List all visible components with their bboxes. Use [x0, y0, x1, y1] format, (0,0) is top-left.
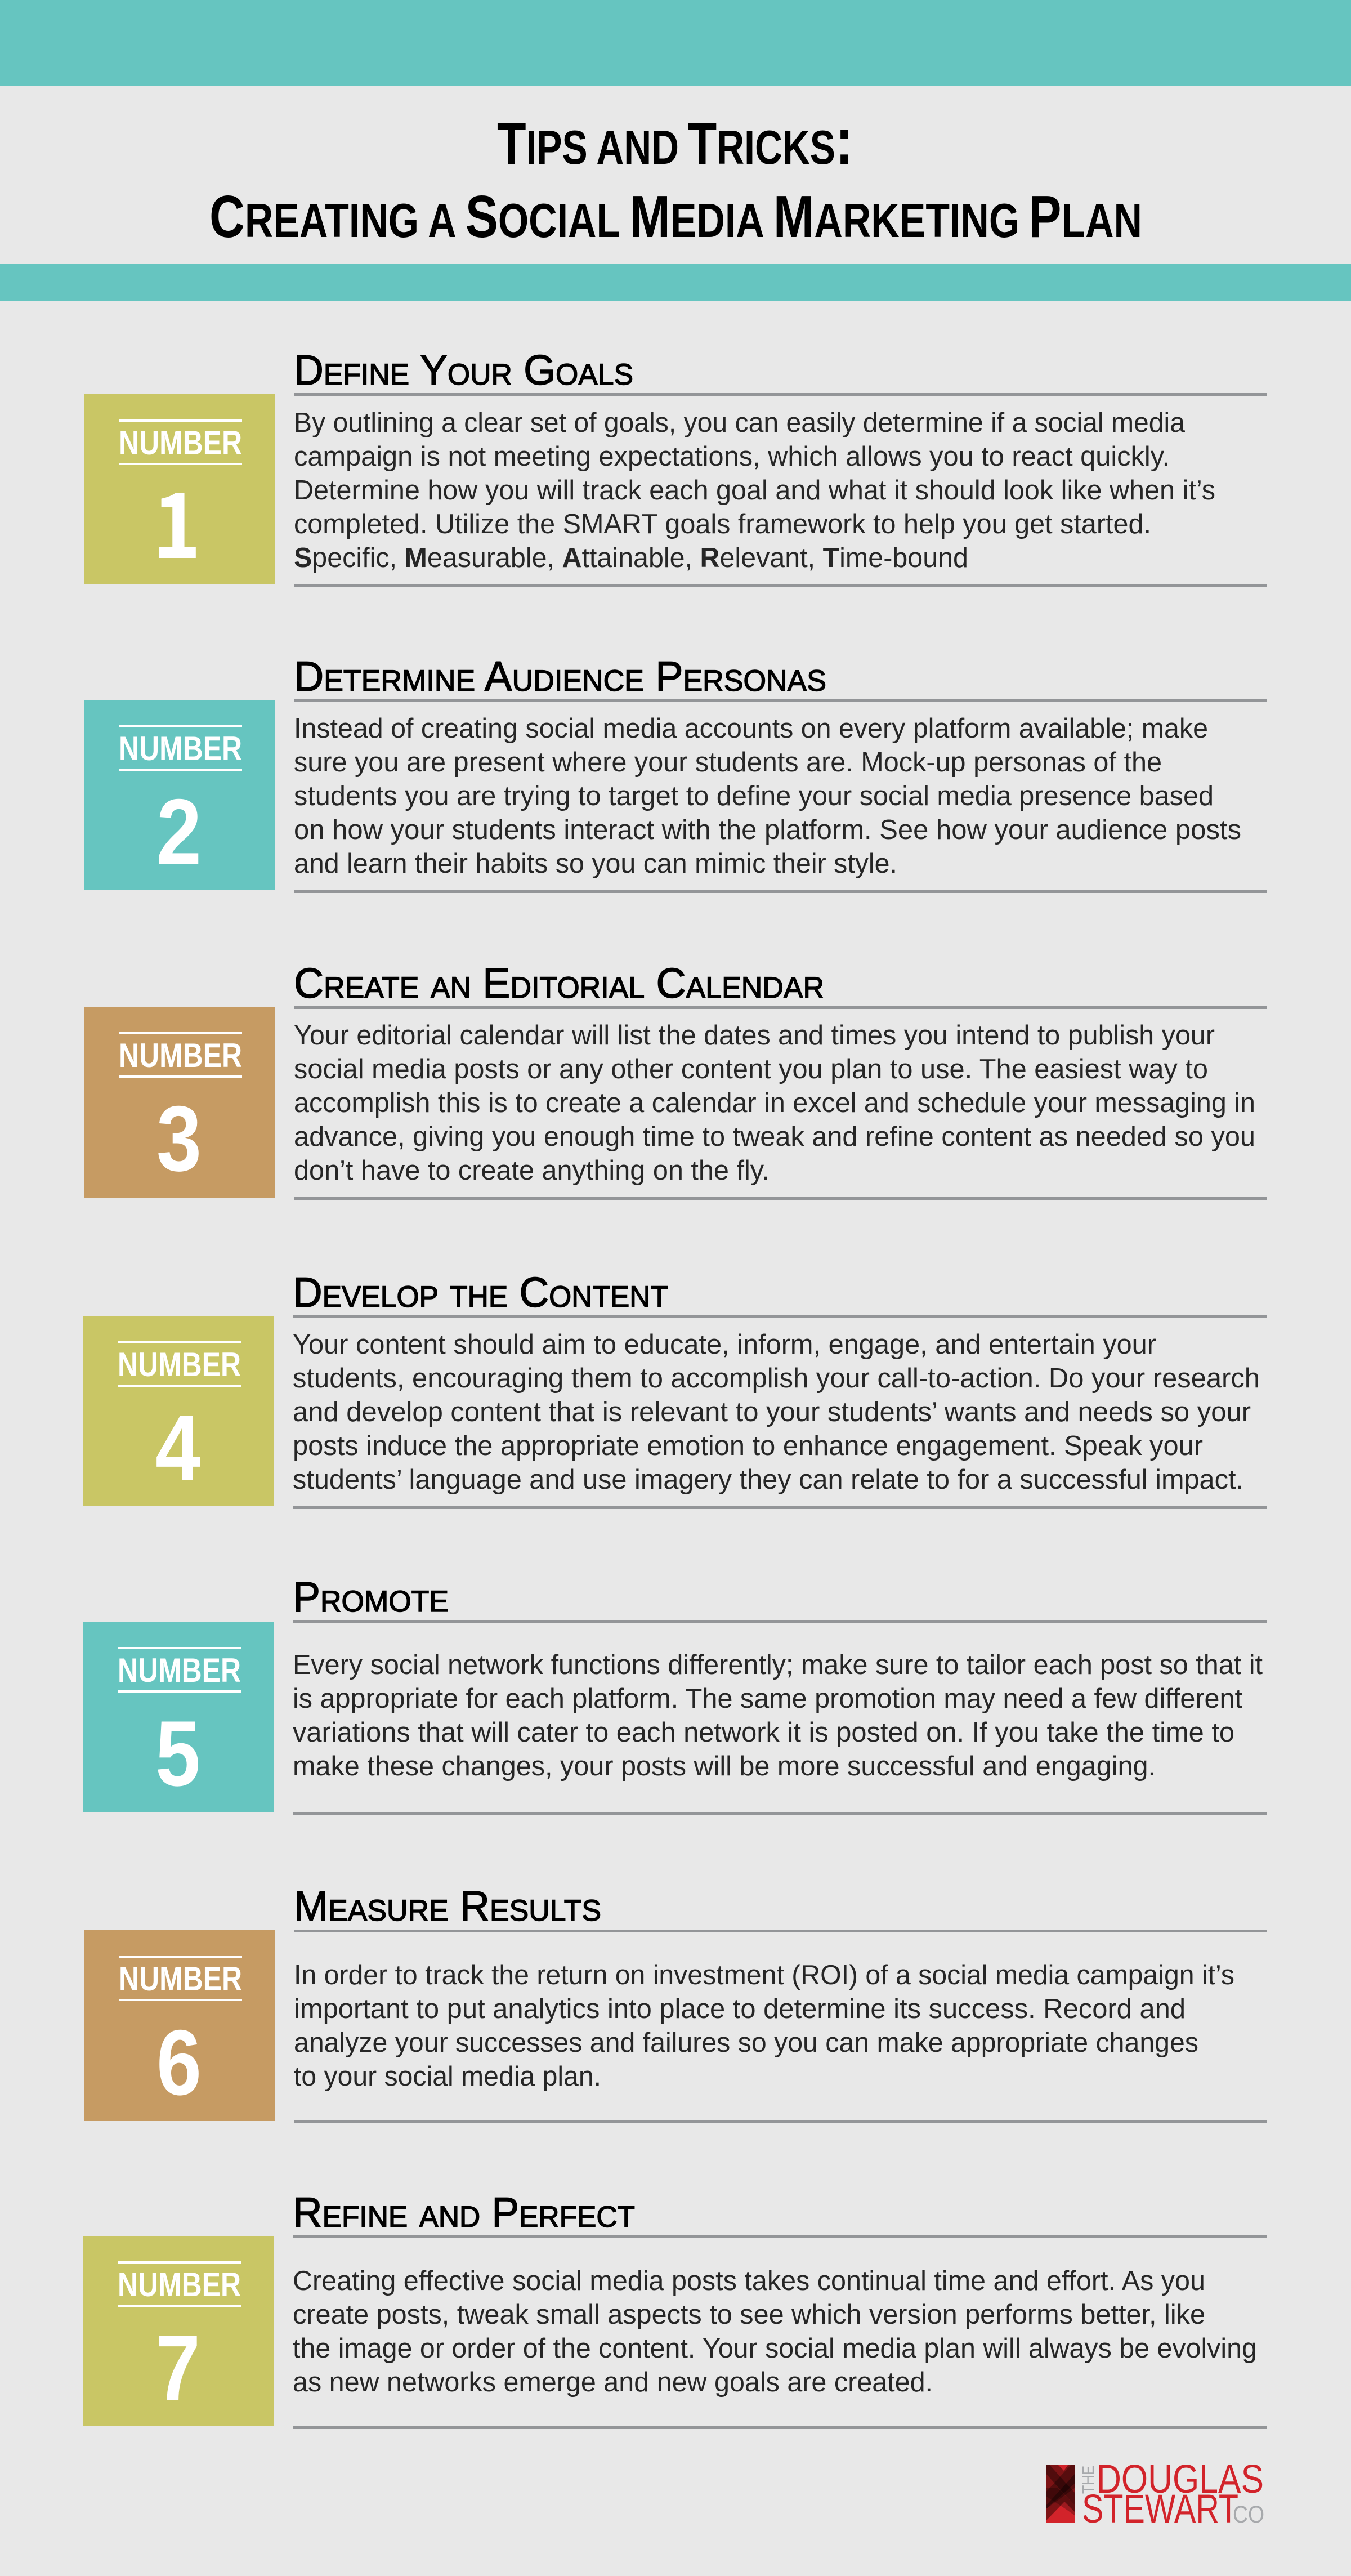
number badge 6: 6: [156, 2011, 202, 2114]
logo word THE: THE: [1080, 2466, 1098, 2494]
lower teal band: [0, 264, 1351, 301]
body text 7: the image or order of the content. Your social media plan will always be evolving: [293, 2333, 1257, 2364]
body text 2: [294, 713, 1241, 879]
body text 3: [294, 1020, 1255, 1186]
panel: tip 2 determine audience personas: [84, 653, 1267, 893]
number badge 7: NUMBER: [118, 2266, 241, 2303]
body text 7: [293, 2266, 1257, 2398]
heading 2: Determine Audience Personas: [294, 653, 826, 700]
title: [209, 102, 1142, 252]
title: Tips and Tricks:: [497, 102, 853, 178]
number badge 7: 7: [155, 2316, 200, 2419]
number badge 2: NUMBER: [119, 730, 242, 767]
heading 6: Measure Results: [294, 1882, 601, 1930]
panel: tip 6 measure results: [84, 1882, 1267, 2123]
body text 7: Creating effective social media posts takes continual time and effort. As you: [293, 2266, 1205, 2296]
number badge 4: 4: [155, 1396, 200, 1499]
body text 4: students, encouraging them to accomplish your call-to-action. Do your research: [293, 1363, 1260, 1394]
top teal band: [0, 0, 1351, 86]
panel: tip 3 create an editorial calendar: [84, 959, 1267, 1200]
number badge 1: 1: [153, 454, 201, 584]
body text 6: important to put analytics into place to determine its success. Record and: [294, 1994, 1186, 2024]
number badge 6: [84, 1930, 275, 2121]
body text 3: accomplish this is to create a calendar in excel and schedule your messaging in: [294, 1088, 1255, 1118]
logo: The Douglas Stewart Co: [1046, 2457, 1264, 2532]
number badge 3: NUMBER: [119, 1037, 242, 1074]
body text 2: students you are trying to target to define your social media presence based: [294, 781, 1214, 811]
panel: tip 1 define your goals: [84, 346, 1267, 587]
number badge 6: NUMBER: [119, 1960, 242, 1998]
panel: tip 5 promote: [83, 1573, 1267, 1815]
number badge 4: [83, 1316, 274, 1506]
body text 6: to your social media plan.: [294, 2061, 601, 2092]
number badge 1: NUMBER: [119, 424, 242, 462]
number badge 4: NUMBER: [118, 1346, 241, 1383]
body text 4: [293, 1329, 1260, 1495]
body text 7: create posts, tweak small aspects to see which version performs better, like: [293, 2300, 1205, 2330]
body text 4: Your content should aim to educate, inform, engage, and entertain your: [293, 1329, 1156, 1360]
body text 1: completed. Utilize the SMART goals framework to help you get started.: [294, 509, 1151, 539]
panel: tip 7 refine and perfect: [83, 2189, 1267, 2429]
body text 3: advance, giving you enough time to tweak and refine content as needed so you: [294, 1122, 1255, 1152]
body text 2: Instead of creating social media accounts on every platform available; make: [294, 713, 1208, 744]
icon: plaid square: [1046, 2465, 1075, 2523]
body text 5: variations that will cater to each network it is posted on. If you take the time to: [293, 1717, 1234, 1748]
body text 5: [293, 1650, 1263, 1782]
body text 2: sure you are present where your students are. Mock-up personas of the: [294, 747, 1162, 778]
heading 7: Refine and Perfect: [293, 2189, 635, 2236]
heading 1: Define Your Goals: [294, 346, 633, 394]
number badge 3: 3: [156, 1087, 202, 1190]
body text 5: Every social network functions differently; make sure to tailor each post so that it: [293, 1650, 1263, 1680]
body text 4: posts induce the appropriate emotion to enhance engagement. Speak your: [293, 1431, 1203, 1461]
number badge 5: 5: [155, 1702, 200, 1805]
body text 6: analyze your successes and failures so you can make appropriate changes: [294, 2028, 1198, 2058]
body text 2: and learn their habits so you can mimic their style.: [294, 849, 897, 879]
number badge 7: [83, 2236, 274, 2426]
body text 1: Determine how you will track each goal and what it should look like when it’s: [294, 475, 1215, 506]
title: Creating a Social Media Marketing Plan: [209, 175, 1142, 252]
panel: tip 4 develop the content: [83, 1269, 1267, 1509]
body text 1: campaign is not meeting expectations, which allows you to react quickly.: [294, 441, 1170, 472]
body text 2: on how your students interact with the platform. See how your audience posts: [294, 815, 1241, 845]
number badge 5: NUMBER: [118, 1651, 241, 1689]
number badge 2: [84, 700, 275, 890]
logo word DOUGLAS: DOUGLAS: [1097, 2457, 1264, 2502]
number badge 2: 2: [156, 780, 202, 883]
body text 1: By outlining a clear set of goals, you can easily determine if a social media: [294, 408, 1186, 438]
logo word STEWART: STEWART: [1082, 2487, 1238, 2532]
heading 4: Develop the Content: [293, 1269, 668, 1316]
body text 5: make these changes, your posts will be more successful and engaging.: [293, 1751, 1156, 1782]
logo word CO: CO: [1233, 2501, 1264, 2528]
body text 7: as new networks emerge and new goals are created.: [293, 2367, 933, 2398]
number badge 1: [84, 394, 275, 584]
heading 3: Create an Editorial Calendar: [294, 959, 824, 1007]
number badge 3: [84, 1007, 275, 1198]
body text 1: [294, 408, 1215, 573]
body text 3: don’t have to create anything on the fly.: [294, 1155, 770, 1186]
heading 5: Promote: [293, 1573, 449, 1620]
body text 3: Your editorial calendar will list the dates and times you intend to publish your: [294, 1020, 1215, 1051]
body text 6: [294, 1960, 1234, 2092]
number badge 5: [83, 1622, 274, 1812]
body text 1: Specific, Measurable, Attainable, Relevant, Time-bound: [294, 543, 968, 573]
body text 5: is appropriate for each platform. The same promotion may need a few different: [293, 1684, 1242, 1714]
body text 3: social media posts or any other content you plan to use. The easiest way to: [294, 1054, 1208, 1084]
body text 4: students’ language and use imagery they can relate to for a successful impact.: [293, 1465, 1243, 1495]
body text 6: In order to track the return on investment (ROI) of a social media campaign it’s: [294, 1960, 1234, 1990]
body text 4: and develop content that is relevant to your students’ wants and needs so your: [293, 1397, 1251, 1427]
